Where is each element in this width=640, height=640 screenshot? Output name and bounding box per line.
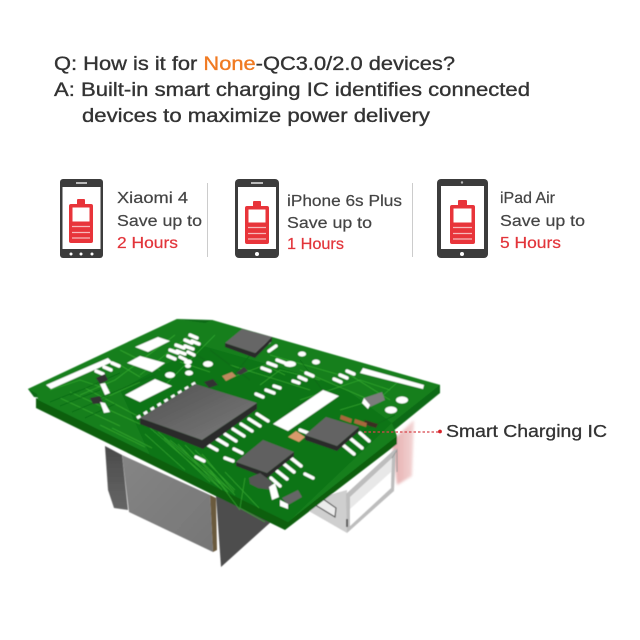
icon: phone with battery xyxy=(235,179,279,258)
icon: tablet with battery xyxy=(437,179,488,258)
label: Xiaomi 4 xyxy=(117,190,188,207)
callout: Smart Charging IC xyxy=(364,421,607,441)
chip: top xyxy=(225,329,272,358)
dotted leader line xyxy=(364,431,440,433)
chip: main processor xyxy=(140,384,257,449)
question line: Q: How is it for None -QC3.0/2.0 devices? xyxy=(54,53,455,75)
heading: question and answer xyxy=(54,53,530,127)
transformer block xyxy=(105,446,272,567)
label: Save up to xyxy=(500,213,585,230)
pad groups xyxy=(96,335,369,486)
label: iPhone 6s Plus xyxy=(287,193,402,210)
chip: lower xyxy=(236,440,294,478)
USB port xyxy=(307,448,397,533)
dashed pads along main chip xyxy=(137,382,197,418)
label: 5 Hours xyxy=(500,235,561,252)
illustration: charger circuit board xyxy=(28,319,440,567)
callout label: Smart Charging IC xyxy=(446,421,607,441)
chip: smart charging IC xyxy=(305,417,359,451)
item: Xiaomi 4 xyxy=(60,179,202,258)
item: iPad Air xyxy=(437,179,585,258)
answer line 2: devices to maximize power delivery xyxy=(82,105,430,127)
label: Save up to xyxy=(287,215,372,232)
label xyxy=(287,193,402,253)
answer line 1: A: Built-in smart charging IC identifies connected xyxy=(54,79,530,101)
label: 2 Hours xyxy=(117,235,178,252)
pink highlight behind the USB port xyxy=(392,420,414,485)
label xyxy=(500,190,585,252)
label xyxy=(117,190,202,252)
board edge xyxy=(36,398,397,530)
board surface xyxy=(28,319,440,522)
label: 1 Hours xyxy=(287,236,344,253)
label: Save up to xyxy=(117,213,202,230)
icon: phone with battery xyxy=(60,179,103,258)
item: iPhone 6s Plus xyxy=(235,179,402,258)
board cutouts and silkscreen xyxy=(46,337,424,431)
small components xyxy=(90,367,385,509)
leader dot xyxy=(438,430,442,433)
label: iPad Air xyxy=(500,190,555,207)
